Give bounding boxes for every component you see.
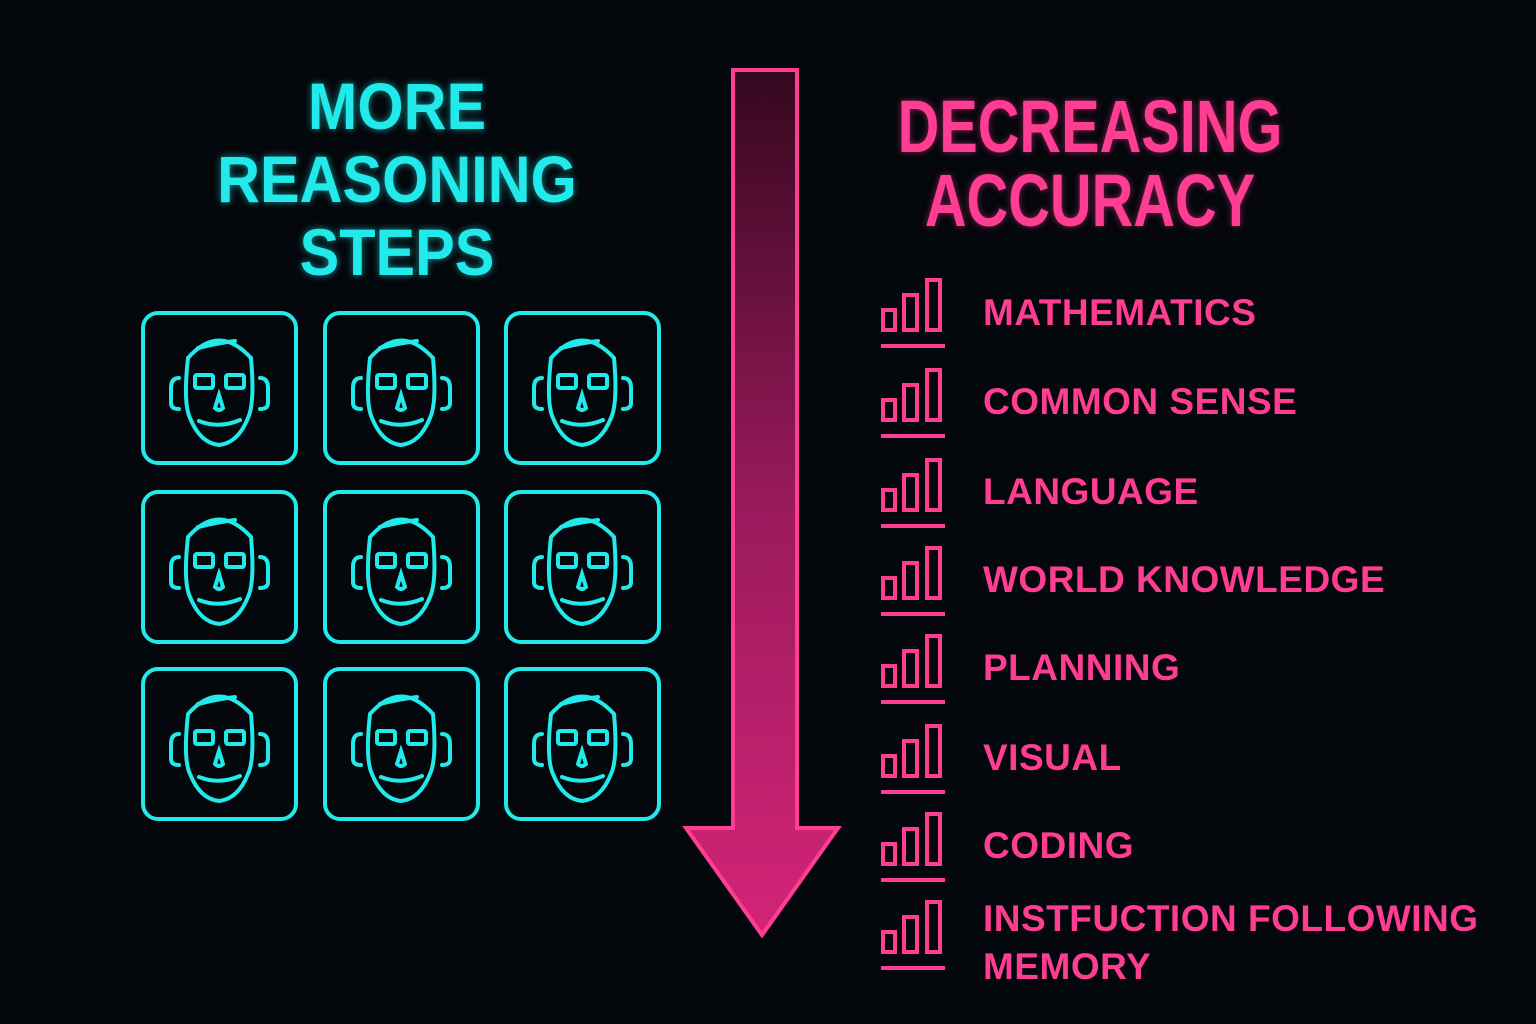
face 7 [143,669,296,819]
item: common sense: COMMON SENSE [983,381,1297,422]
face 6 [506,492,659,642]
item: mathematics: MATHEMATICS [983,292,1256,333]
item: instruction following memory [983,898,1479,987]
title: more reasoning steps [216,69,578,289]
title: decreasing accuracy: DECREASING [898,85,1282,168]
face 4 [143,492,296,642]
face 9 [506,669,659,819]
title: more reasoning steps: STEPS [300,215,494,289]
title: more reasoning steps: MORE [308,69,486,143]
item: coding: CODING [983,825,1134,866]
item: planning: PLANNING [983,647,1180,688]
item: instruction following memory: MEMORY [983,946,1151,987]
item: language: LANGUAGE [983,471,1199,512]
title: more reasoning steps: REASONING [217,142,577,216]
title: decreasing accuracy [896,85,1284,242]
item: instruction following memory: INSTFUCTION FOLLOWING [983,898,1479,939]
arrow: down [682,68,842,938]
face 1 [143,313,296,463]
face 5 [325,492,478,642]
list: bar icons [881,278,945,970]
item: world knowledge: WORLD KNOWLEDGE [983,559,1385,600]
face 8 [325,669,478,819]
face 3 [506,313,659,463]
item: visual: VISUAL [983,737,1122,778]
face 2 [325,313,478,463]
title: decreasing accuracy: ACCURACY [925,159,1255,242]
grid: robot faces [141,311,661,821]
